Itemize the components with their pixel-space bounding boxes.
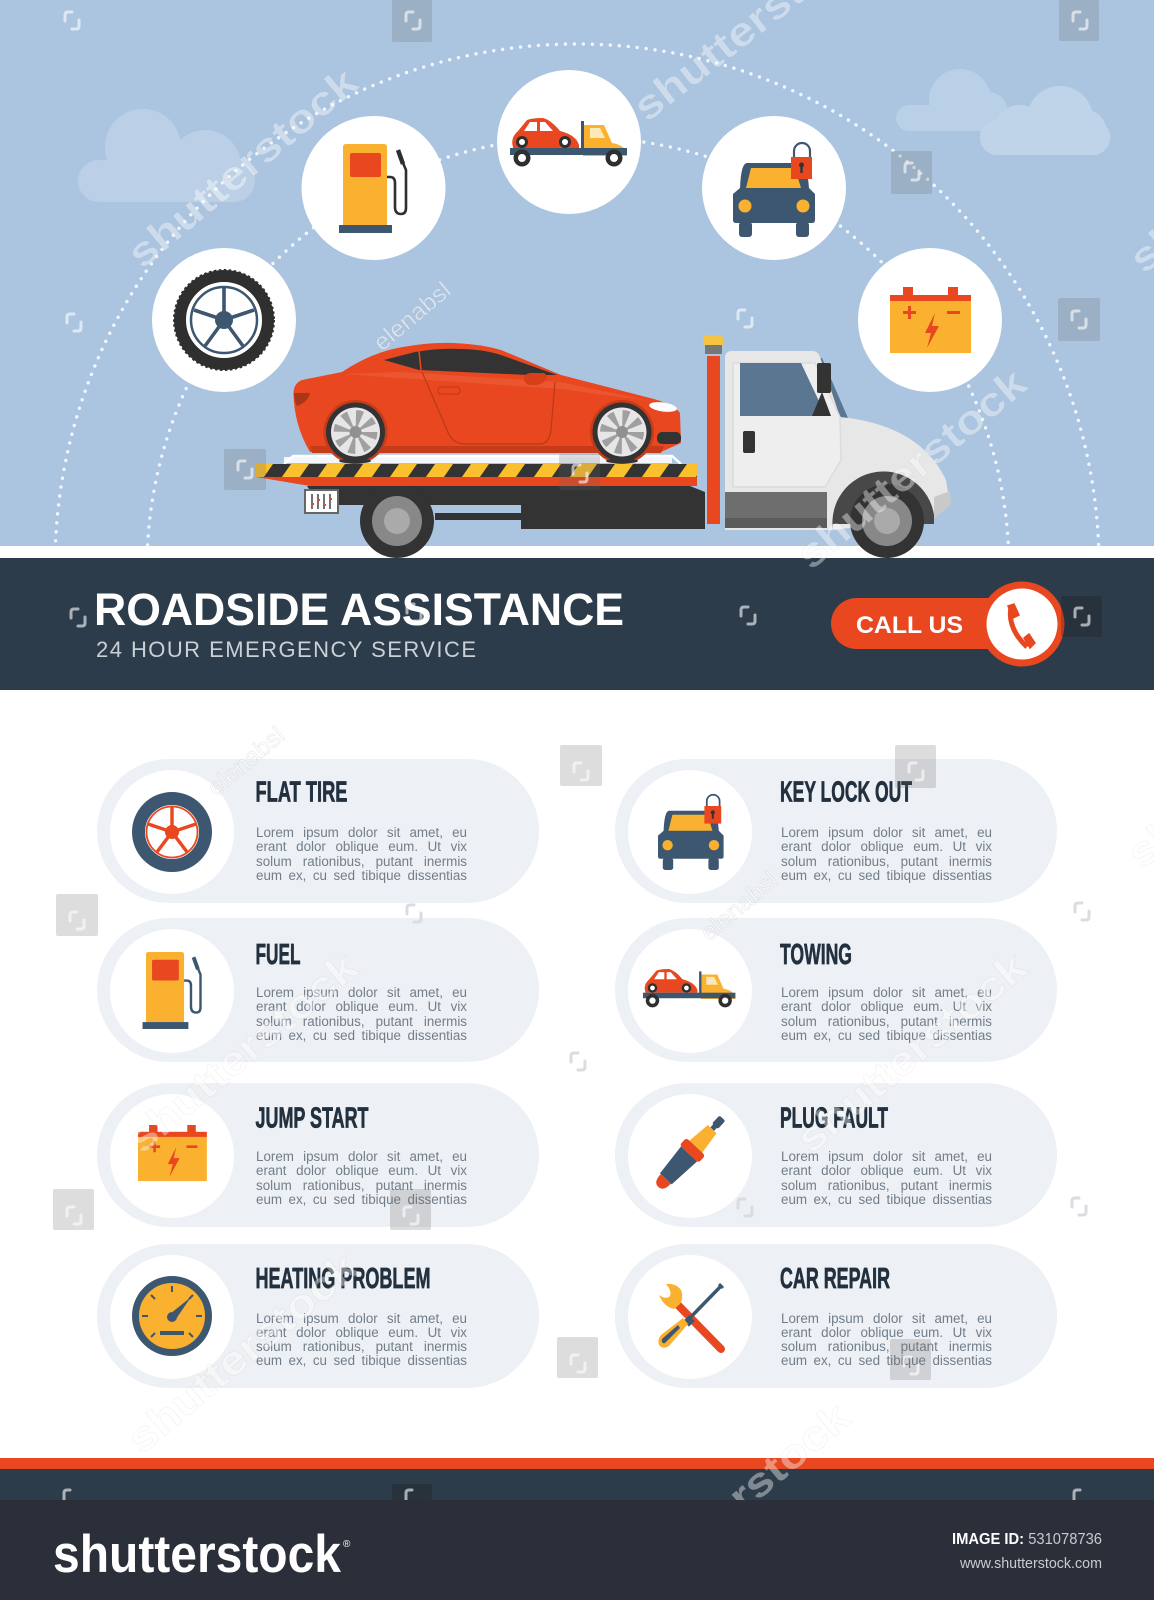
text: plug fault description: erant dolor oblique eum. Ut vix — [781, 1163, 992, 1178]
hero illustration: sky, dotted arcs, service icons and tow truck — [0, 0, 1154, 558]
text: jump start description: solum rationibus, putant inermis — [256, 1178, 467, 1193]
text: car repair description: erant dolor oblique eum. Ut vix — [781, 1325, 992, 1340]
text: heating problem description: Lorem ipsum dolor sit amet, eu — [256, 1310, 467, 1326]
text: plug fault description: Lorem ipsum dolor sit amet, eu — [781, 1149, 992, 1164]
heading: fuel: FUEL — [256, 939, 300, 971]
warning beacon and post — [703, 335, 723, 524]
text: key lock out description: eum ex, cu sed tibique dissentias — [781, 868, 992, 883]
heading: roadside assistance: ROADSIDE ASSISTANCE — [94, 584, 624, 635]
icon: temperature gauge — [110, 1255, 234, 1379]
red sports car — [294, 343, 681, 464]
orange footer stripe — [0, 1458, 1154, 1469]
call us button — [831, 582, 1064, 666]
text: towing description: solum rationibus, putant inermis — [781, 1014, 992, 1029]
text: key lock out description: solum rationibus, putant inermis — [781, 854, 992, 869]
call us button: CALL US — [856, 612, 963, 639]
icon: tow truck in circle — [497, 70, 641, 214]
tow truck with red car — [255, 335, 951, 558]
text: flat tire description: solum rationibus, putant inermis — [256, 854, 467, 869]
heading: heating problem: HEATING PROBLEM — [256, 1263, 430, 1295]
text: towing description: eum ex, cu sed tibique dissentias — [781, 1028, 992, 1043]
footer logo: shutterstock: shutterstock — [53, 1525, 341, 1584]
icon: phone handset — [1008, 604, 1035, 648]
text: car repair description: eum ex, cu sed tibique dissentias — [781, 1353, 992, 1368]
watermark overlay: elenabsl — [369, 277, 456, 357]
watermark overlay: shutterstock — [787, 359, 1035, 578]
stock footer bar — [0, 1500, 1154, 1600]
heading: flat tire: FLAT TIRE — [256, 777, 348, 809]
watermark overlay: elenabsl — [696, 867, 783, 947]
icon: tire in circle — [152, 248, 296, 392]
text: jump start description: eum ex, cu sed tibique dissentias — [256, 1192, 467, 1207]
footer text: website: www.shutterstock.com — [959, 1556, 1102, 1572]
truck chassis — [307, 486, 705, 529]
text: heating problem description: solum rationibus, putant inermis — [256, 1339, 467, 1354]
text: plug fault description — [781, 1149, 992, 1207]
truck cab — [725, 351, 951, 530]
text: car repair description: solum rationibus, putant inermis — [781, 1339, 992, 1354]
panel: plug fault — [615, 1083, 1057, 1227]
cloud: right front — [980, 86, 1110, 155]
footer logo: shutterstock: ® — [343, 1539, 351, 1550]
icon: locked car — [628, 770, 752, 894]
subheading: 24 HOUR EMERGENCY SERVICE — [96, 637, 476, 662]
flatbed deck with hazard stripes — [255, 456, 697, 486]
watermark overlay: shutterstock — [118, 943, 366, 1162]
heading: jump start: JUMP START — [256, 1103, 369, 1135]
text: jump start description: erant dolor oblique eum. Ut vix — [256, 1163, 467, 1178]
icon: locked car in circle — [702, 116, 846, 260]
dark footer band — [0, 1469, 1154, 1500]
control box — [305, 490, 338, 513]
dark title band — [0, 558, 1154, 690]
watermark overlay: shutterstock — [118, 58, 366, 277]
text: key lock out description: Lorem ipsum dolor sit amet, eu — [781, 825, 992, 840]
panel: car repair — [615, 1244, 1057, 1388]
icon: flat tire — [110, 770, 234, 894]
heading: car repair: CAR REPAIR — [780, 1263, 890, 1295]
panel: fuel — [97, 918, 539, 1062]
cloud: right back — [896, 69, 1010, 132]
text: flat tire description: Lorem ipsum dolor sit amet, eu — [256, 825, 467, 840]
text: fuel description — [256, 985, 467, 1043]
icon: fuel pump in circle — [302, 116, 446, 260]
watermark overlay: shutterstock — [787, 943, 1035, 1162]
text: key lock out description: erant dolor oblique eum. Ut vix — [781, 839, 992, 854]
panel: flat tire — [97, 759, 539, 903]
panel: heating problem — [97, 1244, 539, 1388]
panel: key lock out — [615, 759, 1057, 903]
icon: battery in circle — [858, 248, 1002, 392]
icon: wrench and screwdriver — [628, 1255, 752, 1379]
watermark overlay: shutterstock — [118, 1243, 366, 1462]
icon: fuel pump — [110, 929, 234, 1053]
watermark overlay: elenabsl — [203, 722, 290, 802]
front wheel — [850, 484, 924, 558]
panel: jump start — [97, 1083, 539, 1227]
heading: towing: TOWING — [780, 939, 852, 971]
text: car repair description: Lorem ipsum dolor sit amet, eu — [781, 1310, 992, 1326]
text: heating problem description — [256, 1310, 467, 1368]
text: flat tire description: eum ex, cu sed tibique dissentias — [256, 868, 467, 883]
text: fuel description: eum ex, cu sed tibique dissentias — [256, 1028, 467, 1043]
text: car repair description — [781, 1310, 992, 1368]
panel: towing — [615, 918, 1057, 1062]
text: fuel description: solum rationibus, putant inermis — [256, 1014, 467, 1029]
text: fuel description: erant dolor oblique eum. Ut vix — [256, 999, 467, 1014]
text: jump start description — [256, 1149, 467, 1207]
dotted arcs — [55, 44, 1099, 1088]
text: towing description — [781, 985, 992, 1043]
text: towing description: erant dolor oblique eum. Ut vix — [781, 999, 992, 1014]
car rear wheel — [324, 400, 388, 464]
text: towing description: Lorem ipsum dolor sit amet, eu — [781, 985, 992, 1000]
text: heating problem description: eum ex, cu sed tibique dissentias — [256, 1353, 467, 1368]
text: flat tire description: erant dolor oblique eum. Ut vix — [256, 839, 467, 854]
heading: key lock out: KEY LOCK OUT — [780, 777, 912, 809]
icon: tow truck — [628, 929, 752, 1053]
rear wheel — [360, 484, 434, 558]
text: flat tire description — [256, 825, 467, 883]
footer text: image id: IMAGE ID: 531078736 — [952, 1531, 1102, 1548]
cloud: left — [78, 109, 255, 202]
text: key lock out description — [781, 825, 992, 883]
text: heating problem description: erant dolor oblique eum. Ut vix — [256, 1325, 467, 1340]
icon: battery — [110, 1094, 234, 1218]
text: fuel description: Lorem ipsum dolor sit amet, eu — [256, 985, 467, 1000]
text: plug fault description: solum rationibus, putant inermis — [781, 1178, 992, 1193]
icon: spark plug — [628, 1094, 752, 1218]
text: plug fault description: eum ex, cu sed tibique dissentias — [781, 1192, 992, 1207]
text: jump start description: Lorem ipsum dolor sit amet, eu — [256, 1149, 467, 1164]
heading: plug fault: PLUG FAULT — [780, 1103, 888, 1135]
car front wheel — [590, 400, 654, 464]
